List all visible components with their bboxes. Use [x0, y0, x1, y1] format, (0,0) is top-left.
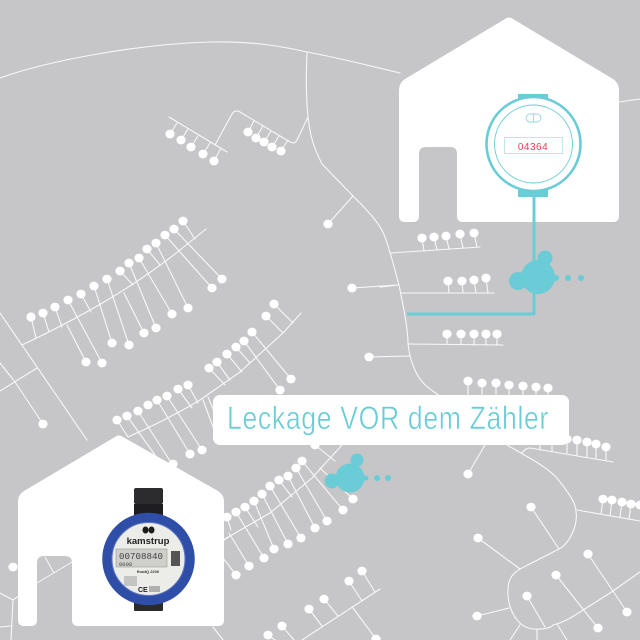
- icon: leak blob lower: [324, 454, 391, 492]
- teal pipe connection: [407, 197, 534, 314]
- icon: leak blob upper: [509, 250, 584, 294]
- callout: leak before the meter: [213, 395, 569, 445]
- street lot dots: [8, 128, 640, 640]
- meter photo: Kamstrup flowIQ: flowIQ 2200: [137, 569, 160, 574]
- house: bottom left: [18, 436, 224, 626]
- meter photo: Kamstrup flowIQ: [107, 488, 190, 611]
- meter photo: Kamstrup flowIQ: kamstrup: [127, 536, 170, 547]
- door streets: bottom left house: [37, 557, 72, 583]
- meter outline: teal digital water meter: 04364: [518, 142, 548, 153]
- house: top right: [399, 18, 619, 222]
- meter photo: Kamstrup flowIQ: 00708840: [119, 552, 163, 562]
- meter outline: teal digital water meter: [486, 94, 580, 197]
- meter photo: Kamstrup flowIQ: CE: [138, 587, 148, 594]
- meter photo: Kamstrup flowIQ: 0008: [119, 561, 132, 568]
- callout: leak before the meter: Leckage VOR dem Zähler: [227, 400, 549, 436]
